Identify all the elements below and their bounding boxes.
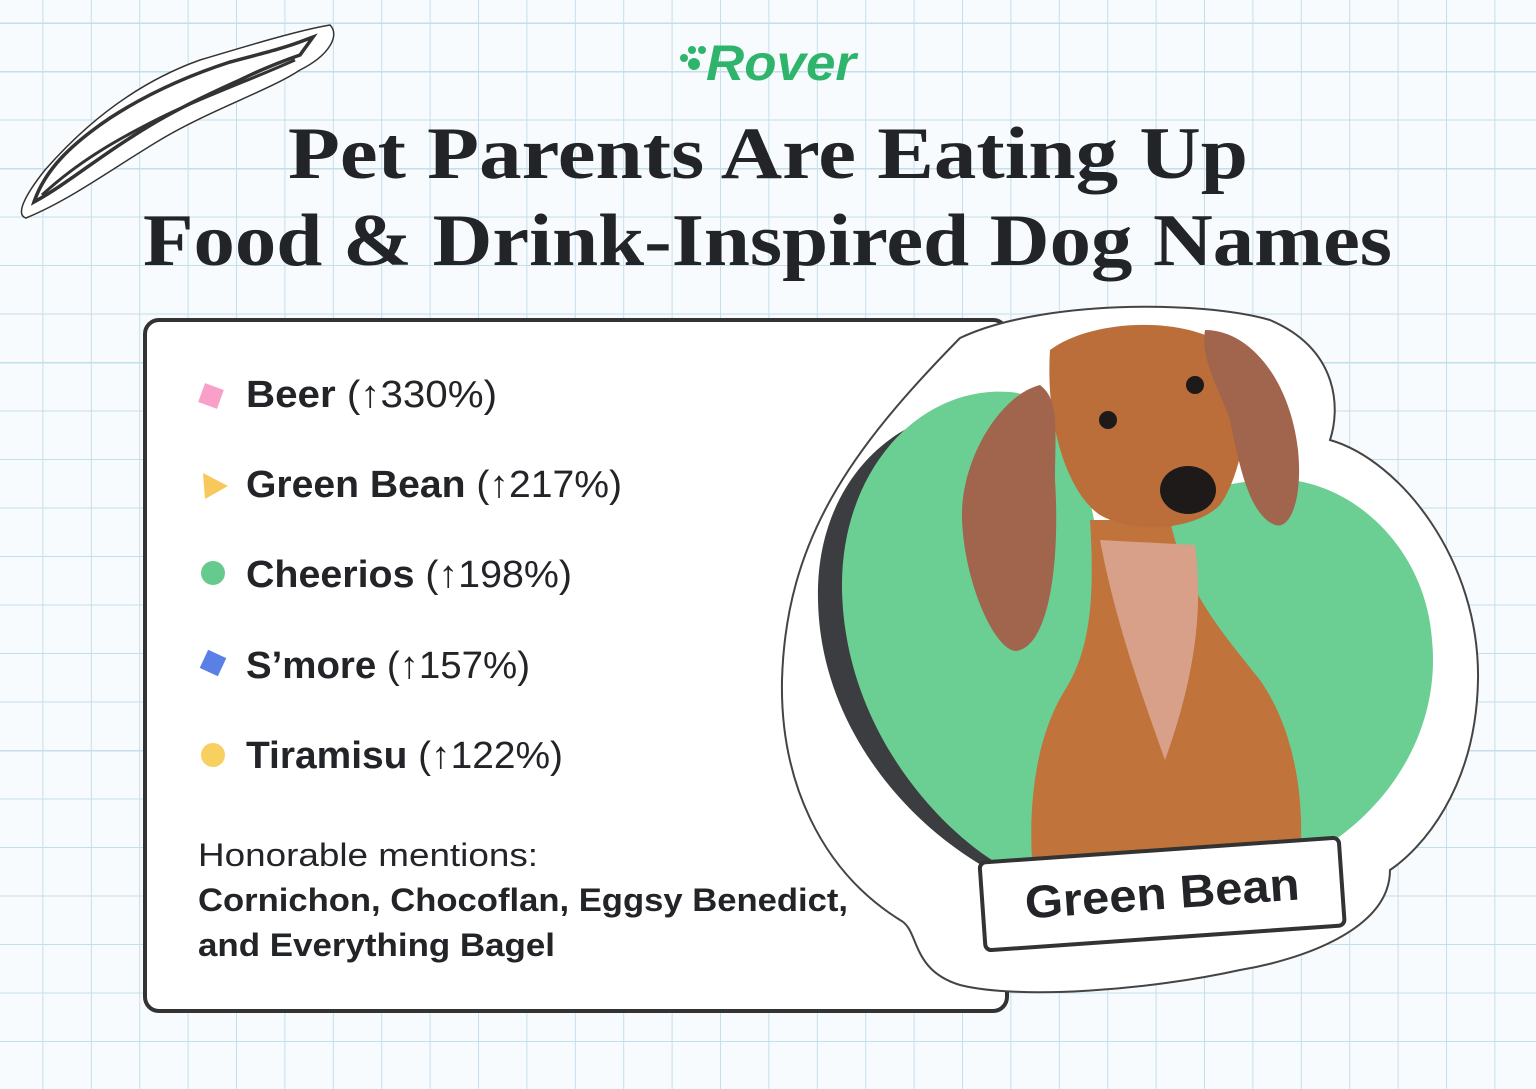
icon: green circle	[201, 561, 225, 585]
text: honorable mentions	[198, 837, 848, 963]
heart shadow	[818, 409, 1330, 880]
icon: yellow triangle	[203, 473, 228, 499]
icon: yellow circle	[201, 743, 225, 767]
dog	[962, 325, 1301, 860]
item: Green Bean: Green Bean (↑217%)	[246, 464, 622, 506]
icon: green bean sketch	[21, 25, 334, 218]
title	[143, 113, 1392, 282]
item: Cheerios: Cheerios (↑198%)	[246, 554, 572, 596]
icon: pink square	[198, 383, 224, 409]
logo: Rover: Rover	[706, 35, 859, 91]
title: Pet Parents Are Eating Up	[288, 113, 1248, 195]
icon: blue diamond	[200, 650, 226, 676]
item: Tiramisu: Tiramisu (↑122%)	[246, 735, 563, 777]
text: honorable mentions: and Everything Bagel	[198, 927, 555, 963]
name tag: Green Bean	[1023, 857, 1301, 929]
name tag	[980, 838, 1345, 950]
item: S'more: S’more (↑157%)	[246, 645, 530, 687]
green heart	[842, 392, 1433, 865]
sticker: dog photo	[782, 307, 1478, 992]
item: Beer: Beer (↑330%)	[246, 374, 497, 416]
text: honorable mentions: Cornichon, Chocoflan, Eggsy Benedict,	[198, 882, 848, 918]
text: honorable mentions: Honorable mentions:	[198, 837, 538, 873]
panel: list	[145, 320, 1007, 1011]
title: Food & Drink-Inspired Dog Names	[143, 200, 1392, 282]
